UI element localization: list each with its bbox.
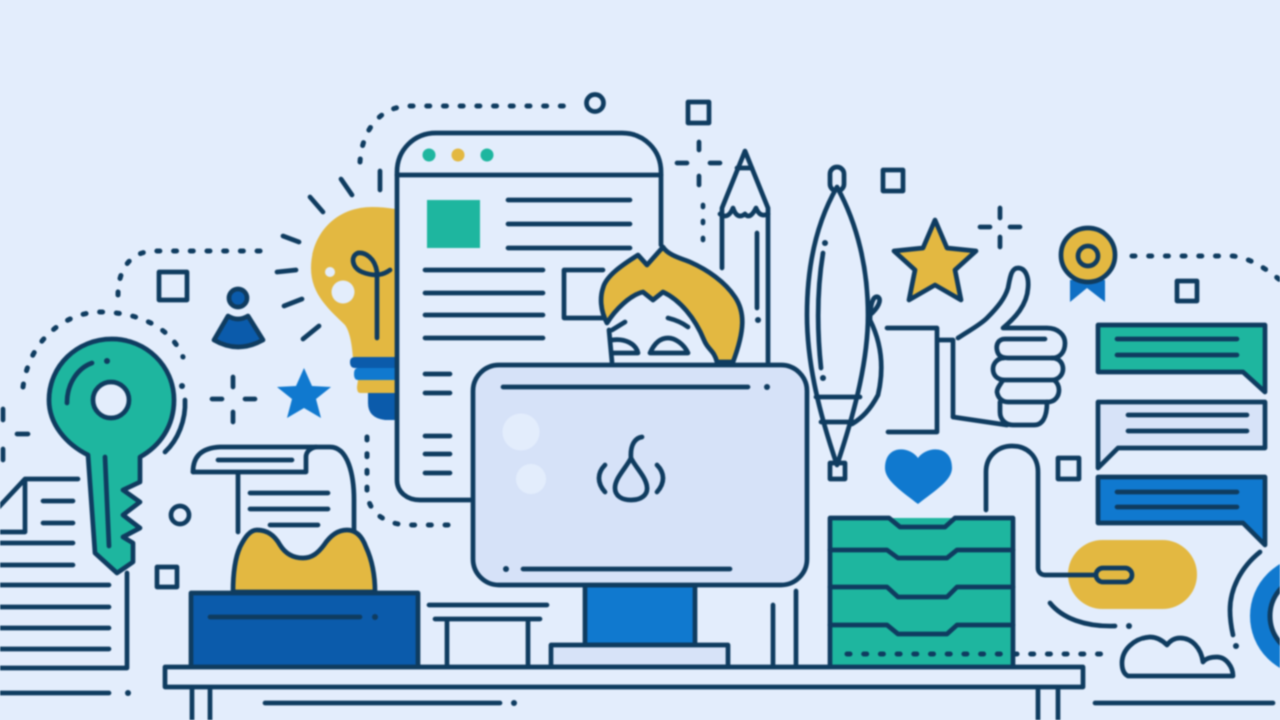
icon: blue heart [885, 449, 952, 504]
dark blue box [191, 593, 418, 668]
file drawers [830, 518, 1013, 668]
icon: cloud [1122, 637, 1233, 676]
decorative square by medal [1177, 281, 1197, 301]
dotted path: medal to right edge [1132, 256, 1280, 280]
dotted path: top to ring [360, 106, 567, 162]
monitor [473, 365, 807, 585]
icon: blue ring at right edge [1250, 556, 1280, 676]
decorative square by star [883, 170, 903, 191]
right desk lines [773, 591, 796, 667]
dotted path: around key [23, 312, 183, 387]
decorative ring by key [171, 506, 189, 524]
decorative square upper left [159, 272, 187, 300]
icon: sparkle by pencil [677, 142, 720, 240]
small side table [429, 605, 547, 667]
dotted path: along drawer [847, 652, 1102, 656]
computer mouse [986, 446, 1197, 629]
speech bubble: blue [1098, 477, 1265, 545]
icon: yellow star [894, 220, 976, 300]
decorative square top [688, 102, 709, 123]
icon: sparkle left [212, 377, 255, 422]
yellow mound on box [233, 530, 375, 592]
icon: thumbs up [887, 268, 1065, 432]
speech bubble: light [1098, 402, 1265, 468]
arc and dot right [1230, 552, 1260, 649]
icon: teal key [49, 339, 185, 573]
document at left [0, 479, 131, 696]
desk [165, 667, 1083, 720]
decorative square by key [157, 567, 177, 587]
icon: blue star [277, 368, 331, 418]
icon: person [214, 289, 263, 347]
icon: left sparkle marks [3, 409, 28, 460]
monitor stand [551, 585, 728, 667]
decorative square by cable [1058, 458, 1079, 479]
scroll paper [193, 447, 354, 532]
dotted path: below browser [367, 437, 452, 525]
icon: pencil [720, 151, 768, 362]
bottom line left [265, 700, 517, 706]
decorative ring top [586, 94, 604, 112]
icon: pear logo [599, 437, 663, 500]
icon: sparkle by star [980, 208, 1020, 247]
character: person peeking behind monitor [601, 247, 742, 362]
bottom line right [1095, 701, 1273, 705]
speech bubble: teal [1098, 325, 1265, 392]
icon: pen nib [807, 167, 881, 479]
browser window [397, 133, 661, 500]
icon: medal [1061, 228, 1115, 302]
dotted path: upper left [118, 251, 265, 295]
icon: light bulb [277, 171, 400, 420]
